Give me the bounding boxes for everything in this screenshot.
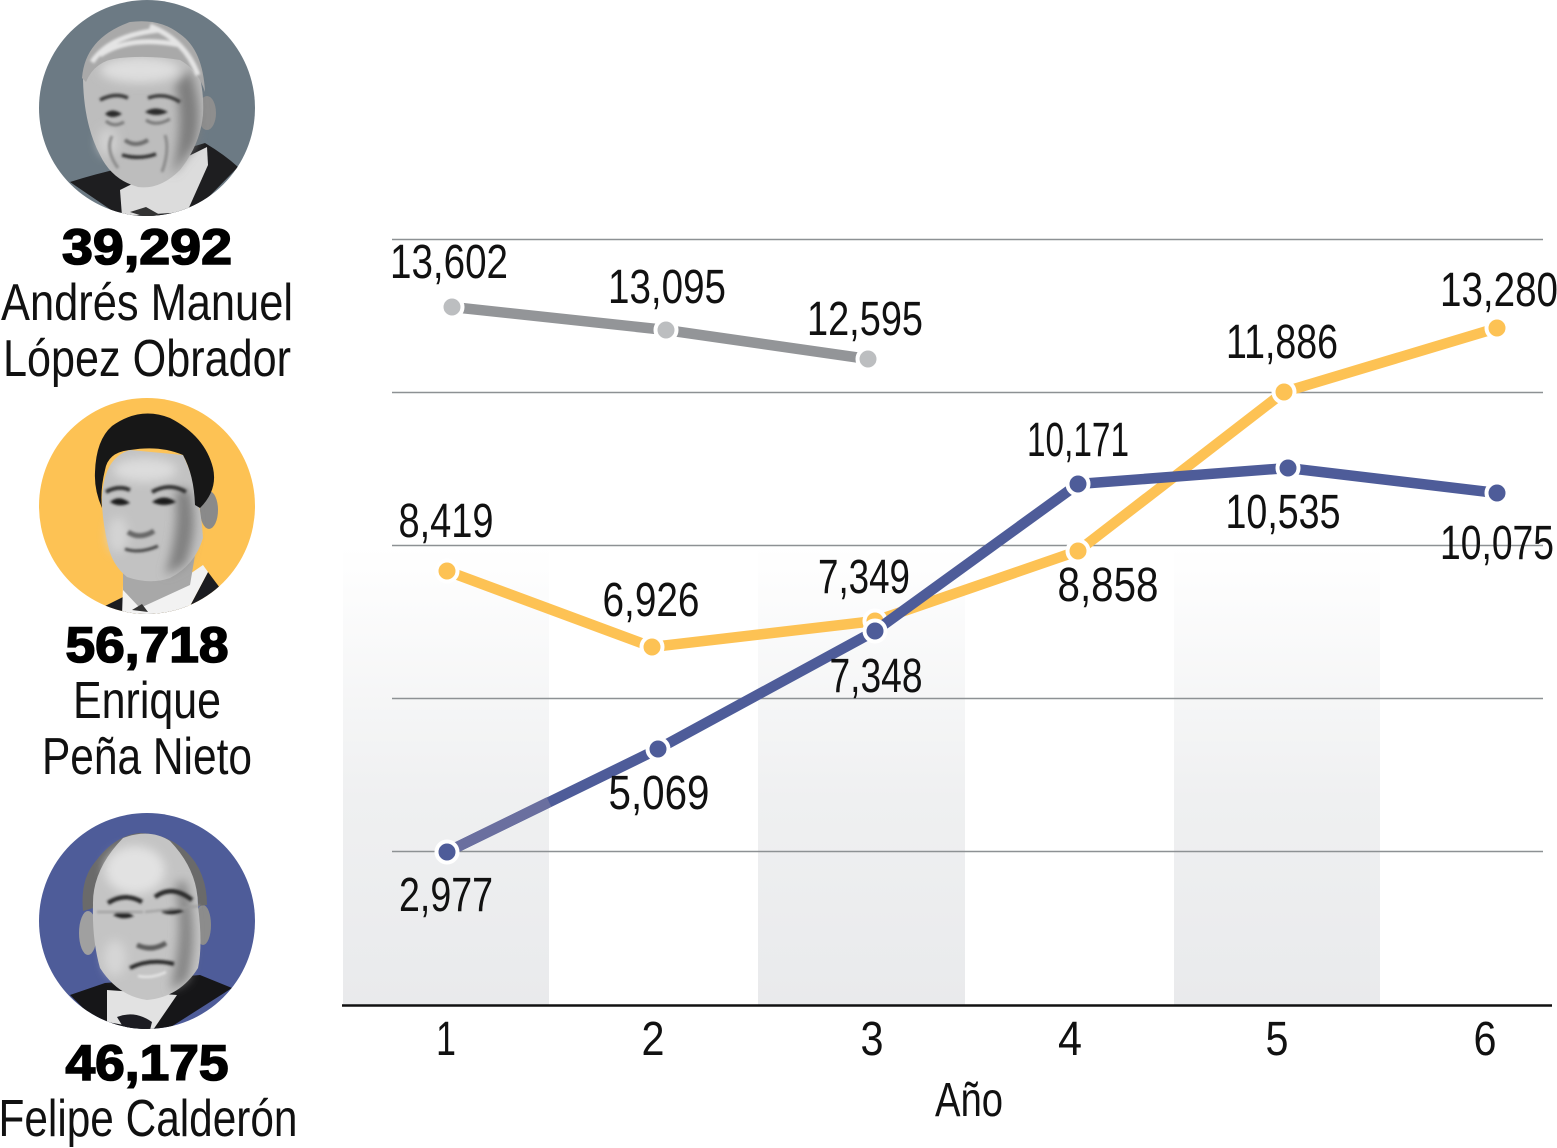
value labels: López Obrador <box>390 236 923 346</box>
panel: AMLO portrait and total <box>1 0 293 388</box>
name: Andrés Manuel López Obrador: López Obrador <box>3 330 291 388</box>
value labels: López Obrador: 13,095 <box>608 261 726 314</box>
value labels: Peña Nieto: 7,349 <box>818 551 910 604</box>
value labels: Calderón: 2,977 <box>399 869 493 922</box>
series: López Obrador (gray) <box>442 296 878 370</box>
value labels: López Obrador: 12,595 <box>807 293 923 346</box>
series: Peña Nieto (yellow) <box>436 318 1508 658</box>
x axis labels: 4 <box>1058 1013 1082 1066</box>
icon: portrait of Enrique Peña Nieto <box>39 398 255 616</box>
value labels: Calderón: 5,069 <box>608 767 710 820</box>
x axis labels: 5 <box>1266 1013 1288 1066</box>
name: Andrés Manuel López Obrador <box>1 274 293 388</box>
x axis title: Año <box>935 1074 1003 1127</box>
name: Felipe Calderón: Felipe Calderón <box>0 1090 298 1148</box>
value labels: Peña Nieto: 6,926 <box>602 574 700 627</box>
icon: portrait of Felipe Calderón <box>39 813 255 1032</box>
x axis labels: 3 <box>860 1013 884 1066</box>
value labels: Peña Nieto: 8,858 <box>1058 559 1158 612</box>
total: 56,718: 56,718 <box>66 617 228 673</box>
value labels: Peña Nieto: 8,419 <box>398 495 494 548</box>
value labels: Peña Nieto <box>398 264 1557 627</box>
x axis labels: 2 <box>642 1013 664 1066</box>
value labels: Calderón: 10,171 <box>1027 414 1129 467</box>
name: Enrique Peña Nieto: Peña Nieto <box>42 728 252 786</box>
value labels: Calderón: 7,348 <box>830 650 922 703</box>
total: 39,292: 39,292 <box>62 219 232 275</box>
total: 46,175: 46,175 <box>66 1035 228 1091</box>
value labels: López Obrador: 13,602 <box>390 236 508 289</box>
name: Enrique Peña Nieto <box>42 672 252 786</box>
value labels: Peña Nieto: 11,886 <box>1226 316 1338 369</box>
value labels: Calderón: 10,535 <box>1226 486 1340 539</box>
panel: Calderón portrait and total <box>0 813 298 1148</box>
line chart <box>342 236 1557 1127</box>
x axis labels: 1 <box>436 1013 456 1066</box>
name: Enrique Peña Nieto: Enrique <box>73 672 221 730</box>
x axis labels <box>436 1013 1496 1066</box>
series: Calderón (blue) <box>436 458 1508 862</box>
name: Andrés Manuel López Obrador: Andrés Manuel <box>1 274 293 332</box>
x axis labels: 6 <box>1474 1013 1496 1066</box>
icon: portrait of Andrés Manuel López Obrador <box>39 0 255 216</box>
value labels: Calderón <box>399 414 1554 922</box>
alternating year bands <box>343 546 1380 1006</box>
panel: EPN portrait and total <box>39 398 255 786</box>
